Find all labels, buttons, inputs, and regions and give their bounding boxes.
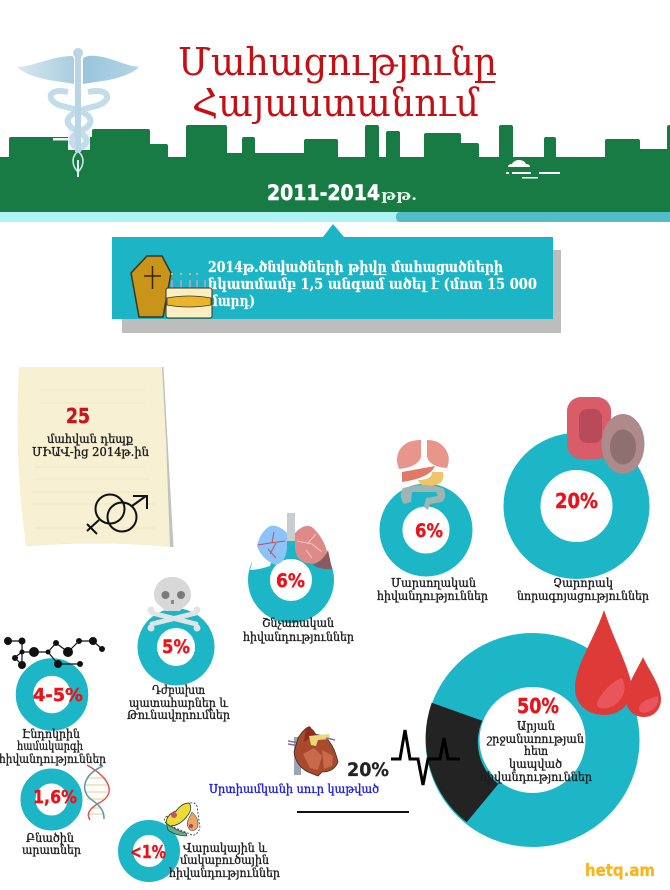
callout text: նկատմամբ 1,5 անգամ ածել է (մոտ 15 000	[208, 275, 537, 293]
icon: ECG line	[391, 730, 460, 785]
icon: bacteria	[164, 803, 200, 836]
label	[169, 841, 280, 880]
label: Թունավորումներ	[127, 708, 230, 722]
chart: congenital donut	[22, 765, 109, 857]
icon: blood drops	[575, 610, 661, 717]
value: 20%	[555, 489, 598, 513]
header: green city skyline	[0, 125, 670, 222]
paper text: մահվան դեպք	[47, 432, 133, 446]
label: Մարսողական	[391, 576, 476, 590]
chart: circulatory donut	[426, 610, 661, 822]
panel: paper note HIV deaths	[18, 367, 173, 547]
label: Չարորակ	[553, 576, 613, 590]
label: Դժբախտ	[152, 683, 205, 697]
icon: lungs	[257, 513, 332, 569]
label	[480, 719, 592, 784]
value: 1,6%	[33, 787, 77, 808]
icon: gender symbols	[87, 494, 147, 534]
chart: infectious donut	[126, 803, 280, 880]
icon: skull and bones	[148, 577, 200, 632]
label: նորագոյացություններ	[517, 589, 649, 603]
paper text: ՄԻԱՎ-ից 2014թ.ին	[32, 445, 149, 459]
logo: hetq.am: hetq.am	[585, 861, 655, 881]
value: myocardial 20%: 20%	[347, 759, 389, 781]
callout text: 2014թ․ծնվածների թիվը մահացածների	[208, 258, 503, 276]
chart: accidents donut	[127, 577, 230, 722]
label: համակարգի	[17, 739, 83, 753]
icon: molecule	[4, 638, 104, 668]
value: 6%	[276, 570, 305, 592]
label: Վարակային և	[183, 841, 267, 855]
title	[178, 40, 497, 125]
subtitle: years: 2011-2014	[267, 181, 380, 205]
label: հիվանդություններ	[243, 630, 354, 644]
value: <1%	[130, 842, 166, 863]
label: շրջանառության	[486, 732, 584, 746]
subtitle: years: թթ.	[381, 186, 417, 204]
icon: caduceus	[17, 48, 139, 177]
label: մակաբուծային	[180, 853, 269, 867]
title: Մահացությունը	[178, 40, 497, 84]
icon: birthday cake	[166, 273, 212, 318]
panel: births vs deaths callout	[112, 224, 561, 333]
label	[22, 831, 81, 857]
label: հիվանդություններ	[0, 752, 106, 766]
label: արատներ	[22, 843, 81, 857]
label: Շնչառական	[262, 616, 334, 630]
label: պատահարներ և	[129, 696, 228, 710]
chart: respiratory donut	[243, 513, 354, 644]
paper number: 25	[66, 404, 90, 428]
icon: heart	[288, 727, 338, 776]
label: Բնածին	[26, 831, 74, 845]
label: հիվանդություններ	[169, 866, 280, 880]
label	[377, 576, 488, 603]
icon: coffin	[131, 256, 171, 317]
label: Էնդոկրին	[22, 727, 80, 741]
label: կապված	[509, 757, 562, 771]
icon: digestive organs	[397, 440, 449, 510]
label	[243, 616, 354, 644]
label	[0, 727, 106, 766]
icon: cloud on skyline	[506, 160, 560, 178]
callout text: մարդ)	[209, 292, 255, 310]
title: Հայաստանում	[192, 81, 479, 125]
callout text	[208, 258, 537, 310]
label: acute myocardial infarction: Սրտիամկանի սուր կաթված	[209, 782, 379, 796]
paper text	[32, 432, 149, 459]
label	[127, 683, 230, 722]
value: 6%	[415, 520, 443, 542]
label: հիվանդություններ	[480, 770, 592, 784]
label: հետ	[524, 744, 548, 758]
label: Արյան	[517, 719, 555, 733]
rule under myocardial label	[297, 811, 409, 813]
icon: cancer cells	[567, 397, 644, 474]
label	[517, 576, 649, 603]
label: հիվանդություններ	[377, 589, 488, 603]
chart: digestive donut	[377, 440, 488, 603]
value: 50%	[517, 694, 559, 718]
value: 5%	[162, 636, 190, 658]
chart: cancer donut	[517, 397, 649, 603]
chart: endocrine donut	[0, 638, 106, 766]
icon: DNA helix	[85, 765, 109, 820]
value: 4-5%	[33, 685, 83, 706]
